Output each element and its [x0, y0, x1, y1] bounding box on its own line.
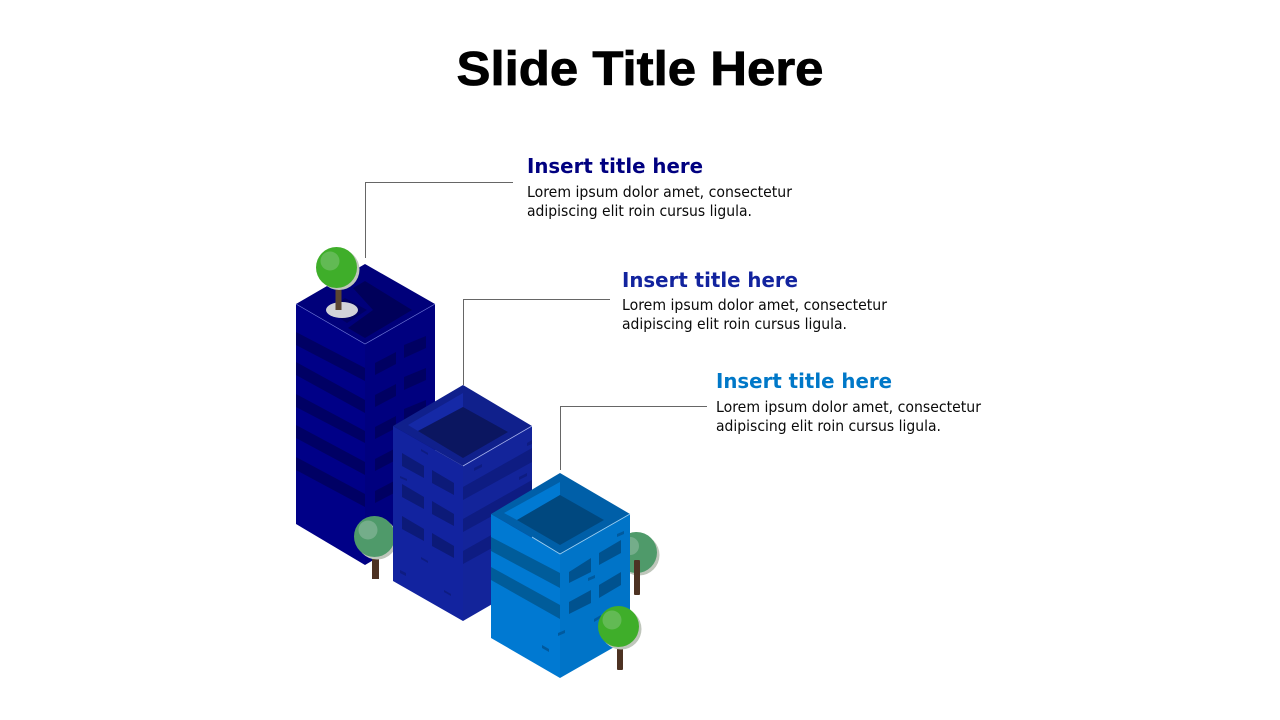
building 3 roof floor: [517, 495, 604, 545]
ground tree trunk: [372, 556, 379, 579]
tree: front of building 3: [598, 606, 642, 670]
back tree crown: [616, 532, 657, 573]
connector line: building 3: [560, 406, 707, 470]
building 2: royal blue tower: [393, 385, 532, 621]
back tree shadow: [618, 534, 660, 576]
building 2 roof edge highlight: [463, 426, 532, 466]
tree: ground between buildings 1 and 2: [354, 516, 398, 579]
title: Slide Title Here: [456, 43, 824, 96]
tree: rooftop on building 1: [316, 247, 360, 318]
ground tree crown: [354, 516, 395, 557]
rooftop tree highlight: [320, 252, 340, 270]
text block 2 body: Lorem ipsum dolor amet, consectetur: [622, 296, 888, 314]
back tree trunk: [634, 560, 640, 595]
building 2 left-face windows: [402, 453, 454, 558]
building 2 small vents: [400, 440, 532, 596]
text block 1 heading: Insert title here: [527, 154, 703, 178]
building 1 roof edge highlight: [296, 304, 435, 344]
text block 3 heading: Insert title here: [716, 369, 892, 393]
building 1 left face: [296, 304, 365, 565]
building 3: bright blue tower: [491, 473, 630, 678]
building 3 roof inner wall: [504, 482, 560, 520]
building 1: dark navy tower: [296, 264, 435, 565]
building 3 roof rim: [491, 473, 630, 554]
building 2 right-face window bands: [463, 448, 532, 564]
text block 1 body: Lorem ipsum dolor amet, consectetur: [527, 183, 793, 201]
back tree highlight: [621, 537, 639, 555]
building 3 right-face windows: [569, 540, 621, 614]
front tree highlight: [602, 610, 622, 630]
building 1 right-face windows: [375, 336, 426, 503]
building 3 left-face window bands: [491, 537, 560, 619]
front tree crown: [598, 606, 639, 647]
building 3 left face: [491, 514, 560, 678]
text block 3 body: Lorem ipsum dolor amet, consectetur: [716, 398, 982, 416]
text block 1 body: [527, 183, 793, 220]
text block 3: [716, 369, 982, 435]
building 2 right face: [463, 426, 532, 621]
rooftop tree trunk: [336, 287, 342, 310]
connector line: building 1: [366, 182, 513, 258]
rooftop tree base: [326, 302, 358, 318]
building 3 small vents: [542, 531, 624, 652]
text block 2 body: [622, 296, 888, 333]
ground tree highlight: [358, 520, 378, 540]
front tree trunk: [617, 646, 623, 670]
text block 1 body: adipiscing elit roin cursus ligula.: [527, 202, 752, 220]
building 2 roof floor: [418, 407, 508, 458]
text block 2 heading: Insert title here: [622, 268, 798, 292]
building 1 roof small panel: [327, 298, 367, 323]
tree: behind building 3 crown: [616, 532, 660, 576]
building 1 roof dark panel: [348, 281, 412, 338]
text block 1: [527, 154, 793, 220]
text block 3 body: adipiscing elit roin cursus ligula.: [716, 417, 941, 435]
building 1 roof: [296, 264, 435, 344]
text block 2 body: adipiscing elit roin cursus ligula.: [622, 315, 847, 333]
text block 3 body: [716, 398, 982, 435]
building 3 roof edge highlight: [532, 514, 630, 554]
rooftop tree crown: [316, 247, 357, 288]
building 2 left face: [393, 426, 463, 621]
building 3 right face: [560, 514, 630, 678]
text block 2: [622, 268, 888, 333]
front tree shadow: [600, 608, 642, 650]
building 1 right face: [365, 304, 435, 565]
rooftop tree shadow: [318, 249, 360, 290]
connector line: building 2: [464, 300, 610, 385]
ground tree shadow: [356, 518, 398, 560]
building 2 roof inner wall: [408, 393, 463, 431]
building 1 left-face window bands: [296, 332, 365, 507]
building 2 roof rim: [393, 385, 532, 466]
